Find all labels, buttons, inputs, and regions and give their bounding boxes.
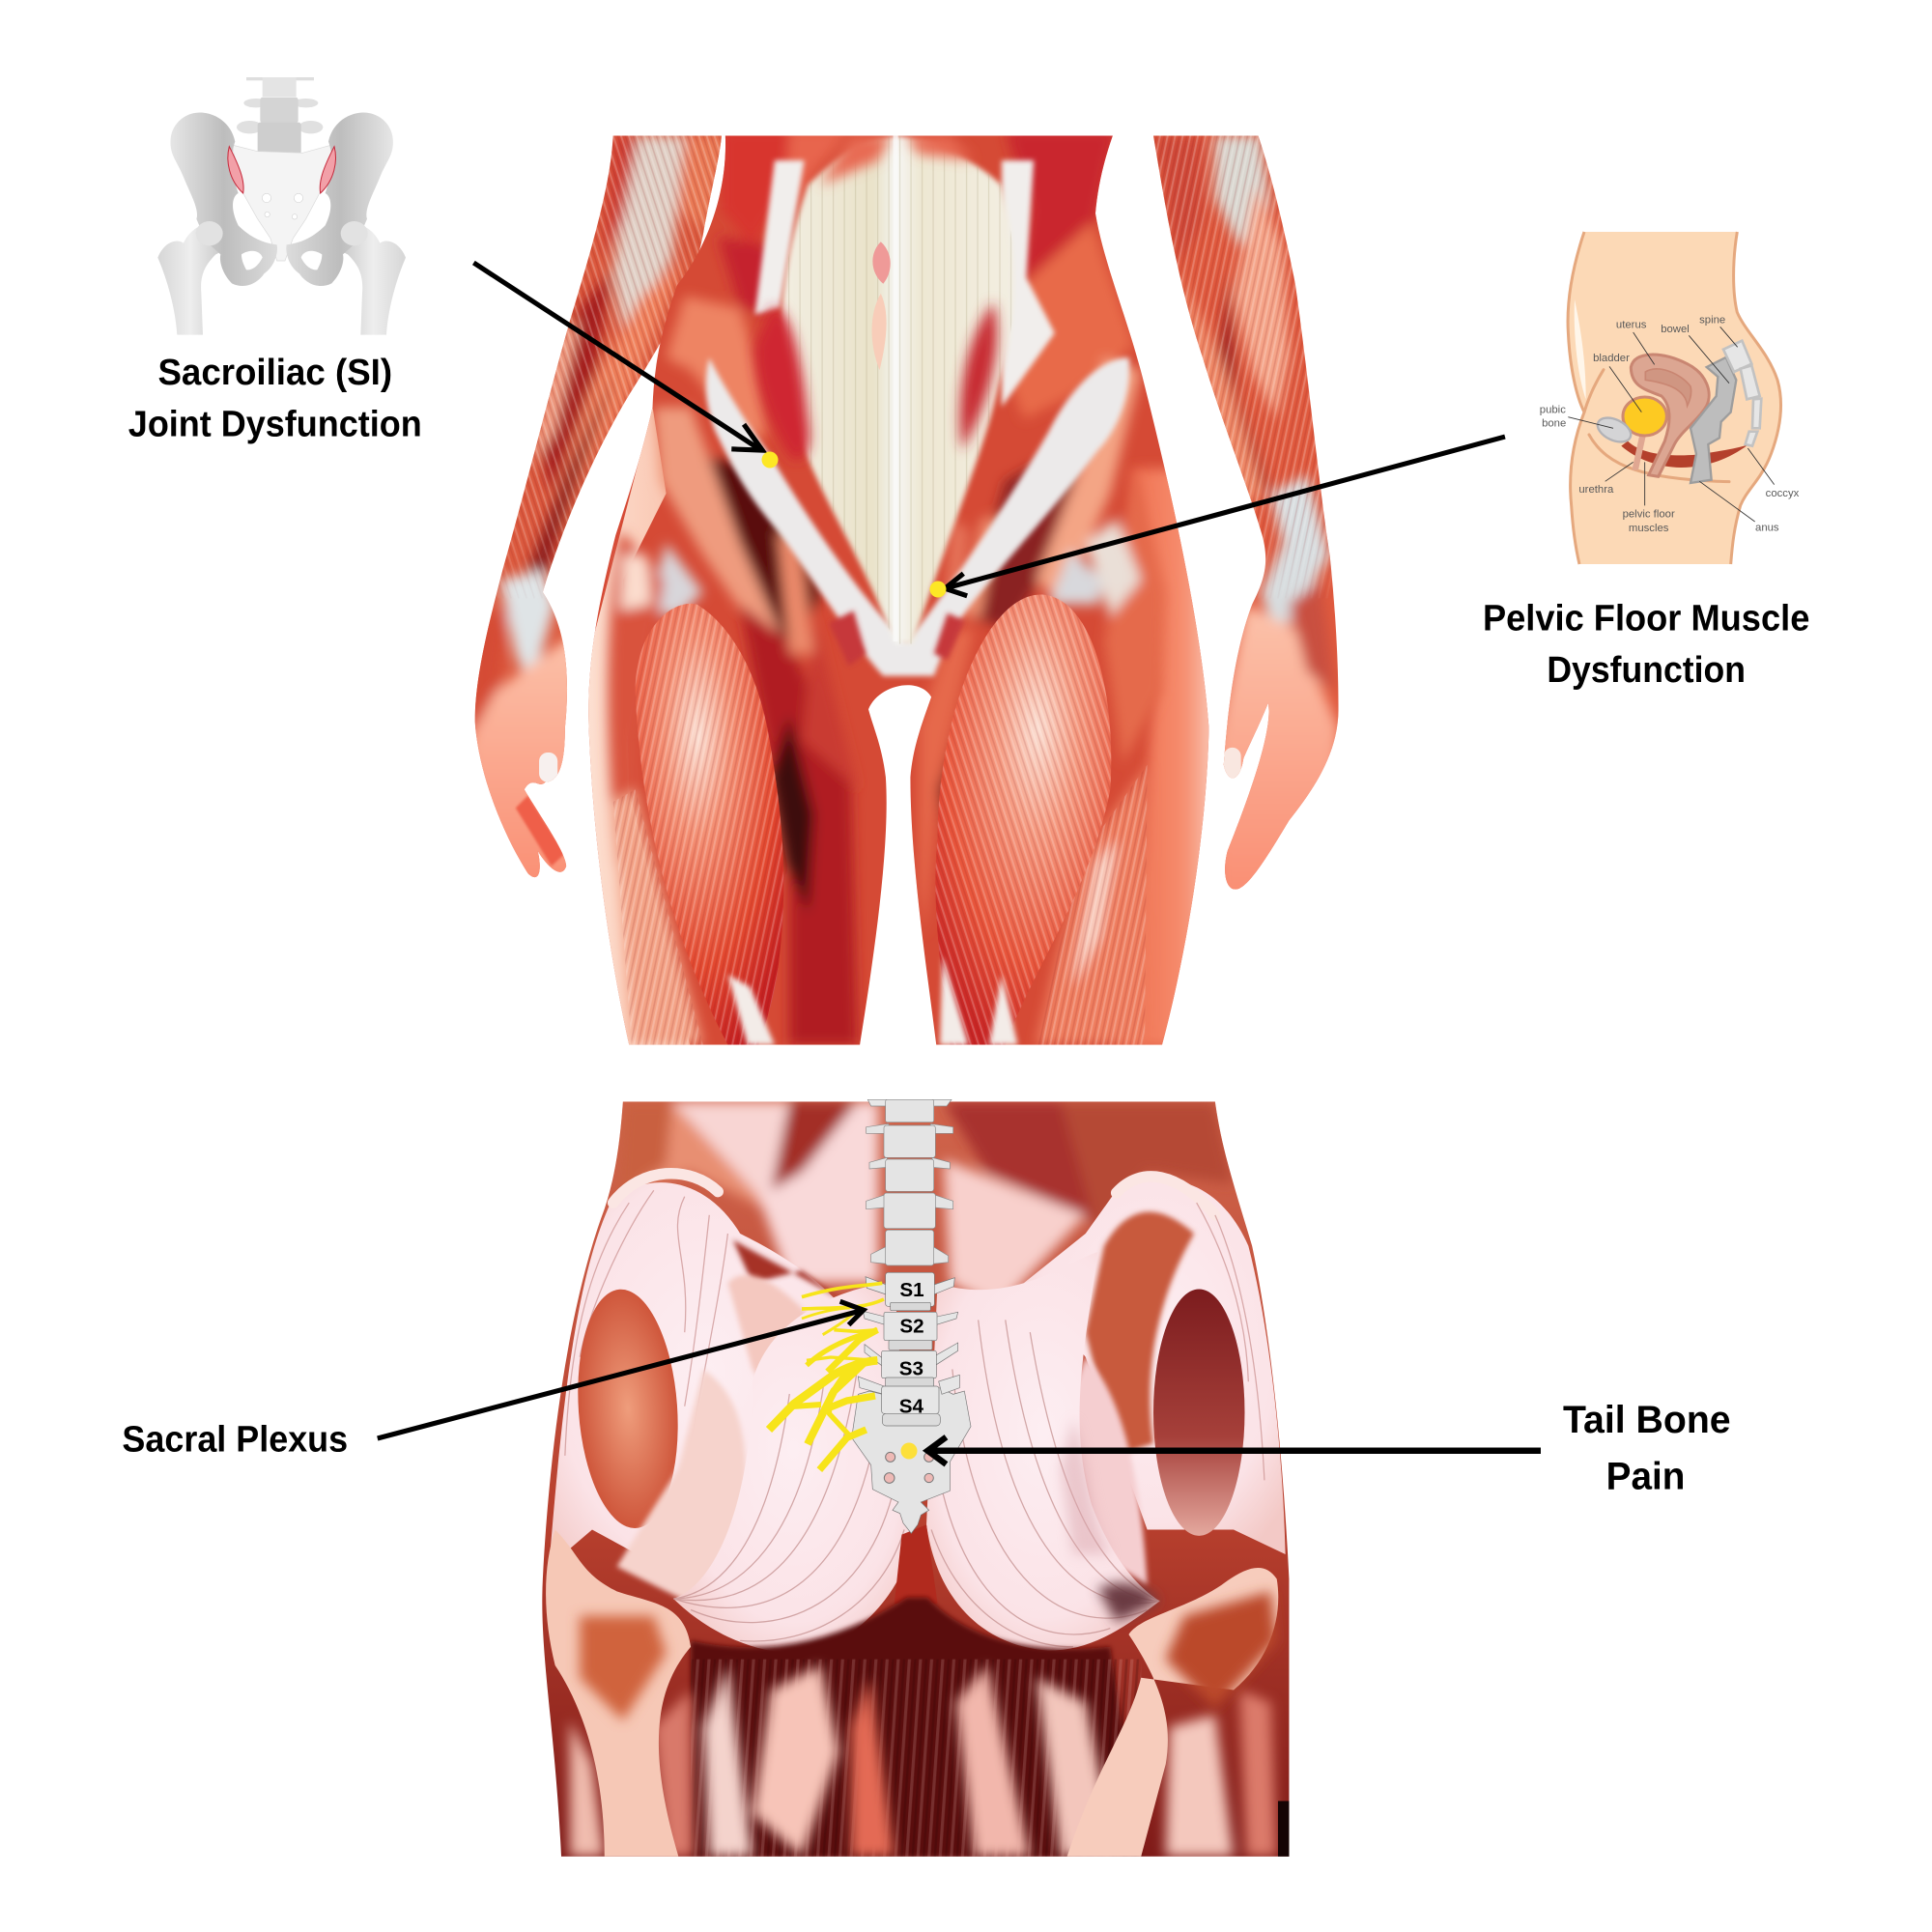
S3 vertebra: S3 xyxy=(899,1357,923,1379)
spine and sacrum diagram xyxy=(769,1099,971,1533)
upper abdomen muscles xyxy=(717,135,788,242)
marker: pelvic floor xyxy=(929,582,947,597)
body outline xyxy=(1568,232,1780,564)
sacrum base xyxy=(852,1388,971,1533)
urethra xyxy=(1632,435,1646,470)
S3 vertebra xyxy=(865,1343,958,1387)
left arm xyxy=(469,129,727,895)
groin tissue xyxy=(829,611,965,667)
diagram labels: bone xyxy=(1542,417,1566,429)
marker: sacroiliac joint xyxy=(761,452,779,468)
diagram labels: coccyx xyxy=(1766,488,1800,499)
medius fibres xyxy=(565,1190,1264,1480)
right gluteus medius xyxy=(1024,1179,1286,1554)
right arm xyxy=(1148,129,1345,900)
S4 vertebra xyxy=(858,1375,959,1426)
left long tendon xyxy=(616,1369,746,1604)
heading: tail bone pain: Pain xyxy=(1606,1455,1685,1497)
lumbar spine xyxy=(237,77,323,155)
torso and thighs xyxy=(580,129,1221,1055)
gluteus fibres xyxy=(673,1320,1159,1647)
inner thigh xyxy=(740,605,858,1045)
spine xyxy=(1723,341,1761,446)
diagram labels: urethra xyxy=(1578,484,1614,496)
left hip xyxy=(157,113,277,335)
S2 vertebra xyxy=(863,1311,958,1350)
diagram labels: anus xyxy=(1755,523,1779,534)
back muscle figure xyxy=(536,1098,1295,1862)
right long tendon xyxy=(1067,1357,1148,1585)
S1 vertebra xyxy=(866,1272,954,1311)
heading: tail bone pain xyxy=(1563,1399,1731,1497)
arrow: sacral plexus xyxy=(378,1301,864,1438)
pelvic floor muscles xyxy=(1621,441,1747,468)
S2 vertebra: S2 xyxy=(899,1315,924,1337)
left quadriceps xyxy=(636,604,783,1045)
heading: sacroiliac joint dysfunction: Sacroiliac (SI) xyxy=(157,352,392,393)
upper arc bands xyxy=(607,1168,1191,1207)
heading: pelvic floor muscle dysfunction: Pelvic Floor Muscle xyxy=(1483,598,1809,639)
iliotibial bands xyxy=(727,1275,820,1419)
left femur xyxy=(546,1529,691,1857)
diagram labels xyxy=(1540,315,1800,534)
icon: pelvic bones xyxy=(157,77,406,335)
left gluteus maximus xyxy=(673,1283,913,1653)
bladder xyxy=(1623,397,1666,436)
right quadriceps xyxy=(935,594,1111,1045)
arrow: pelvic floor xyxy=(945,437,1505,596)
sacral plexus nerves xyxy=(769,1283,884,1470)
heading: sacral plexus: Sacral Plexus xyxy=(122,1418,348,1460)
arrow: sacroiliac joint xyxy=(473,263,762,450)
right femur xyxy=(1067,1568,1278,1857)
arrow: tail bone xyxy=(927,1437,1541,1464)
diagram labels: uterus xyxy=(1616,319,1647,330)
central gap xyxy=(895,1524,938,1604)
thumb nail xyxy=(539,753,557,782)
diagram labels: pubic xyxy=(1540,404,1566,415)
abdominal aponeurosis xyxy=(781,135,1014,644)
navel xyxy=(872,242,891,284)
front muscle figure xyxy=(469,129,1345,1055)
outer skin xyxy=(580,407,691,1048)
S1 vertebra: S1 xyxy=(899,1279,924,1301)
heading: sacroiliac joint dysfunction xyxy=(128,352,422,444)
sacrum xyxy=(232,145,335,261)
rectus muscle patches xyxy=(754,135,997,460)
leader lines xyxy=(1568,327,1775,522)
diagram labels: muscles xyxy=(1629,523,1669,534)
uterus xyxy=(1631,355,1709,476)
thumb nail xyxy=(1224,748,1241,780)
right hip xyxy=(286,113,406,335)
heading: pelvic floor muscle dysfunction xyxy=(1483,598,1809,691)
left oval muscle xyxy=(570,1286,686,1531)
diagram labels: bladder xyxy=(1593,353,1630,364)
right oval muscle xyxy=(1153,1289,1244,1536)
diagram labels: pelvic floor xyxy=(1623,509,1675,521)
upper fascia strips xyxy=(755,160,1055,407)
heading: sacroiliac joint dysfunction: Joint Dysfunction xyxy=(128,403,422,444)
heading: pelvic floor muscle dysfunction: Dysfunction xyxy=(1547,649,1746,691)
left gluteus medius xyxy=(551,1182,834,1551)
heading: tail bone pain: Tail Bone xyxy=(1563,1399,1731,1441)
sacral foramina xyxy=(884,1452,934,1483)
lower dark region xyxy=(691,1598,1141,1857)
upper vertebrae xyxy=(867,1099,953,1265)
diagram labels: spine xyxy=(1699,315,1725,327)
S4 vertebra: S4 xyxy=(899,1396,923,1418)
right gluteus maximus xyxy=(926,1252,1159,1651)
icon: pelvic floor diagram xyxy=(1540,232,1800,564)
marker: tail bone xyxy=(900,1443,918,1459)
pelvic fascia xyxy=(706,357,1129,676)
groin shadows xyxy=(703,456,820,667)
pubic bone xyxy=(1594,413,1634,446)
diagram labels: bowel xyxy=(1661,324,1690,335)
bowel xyxy=(1690,357,1736,483)
lateral thigh xyxy=(608,530,664,950)
